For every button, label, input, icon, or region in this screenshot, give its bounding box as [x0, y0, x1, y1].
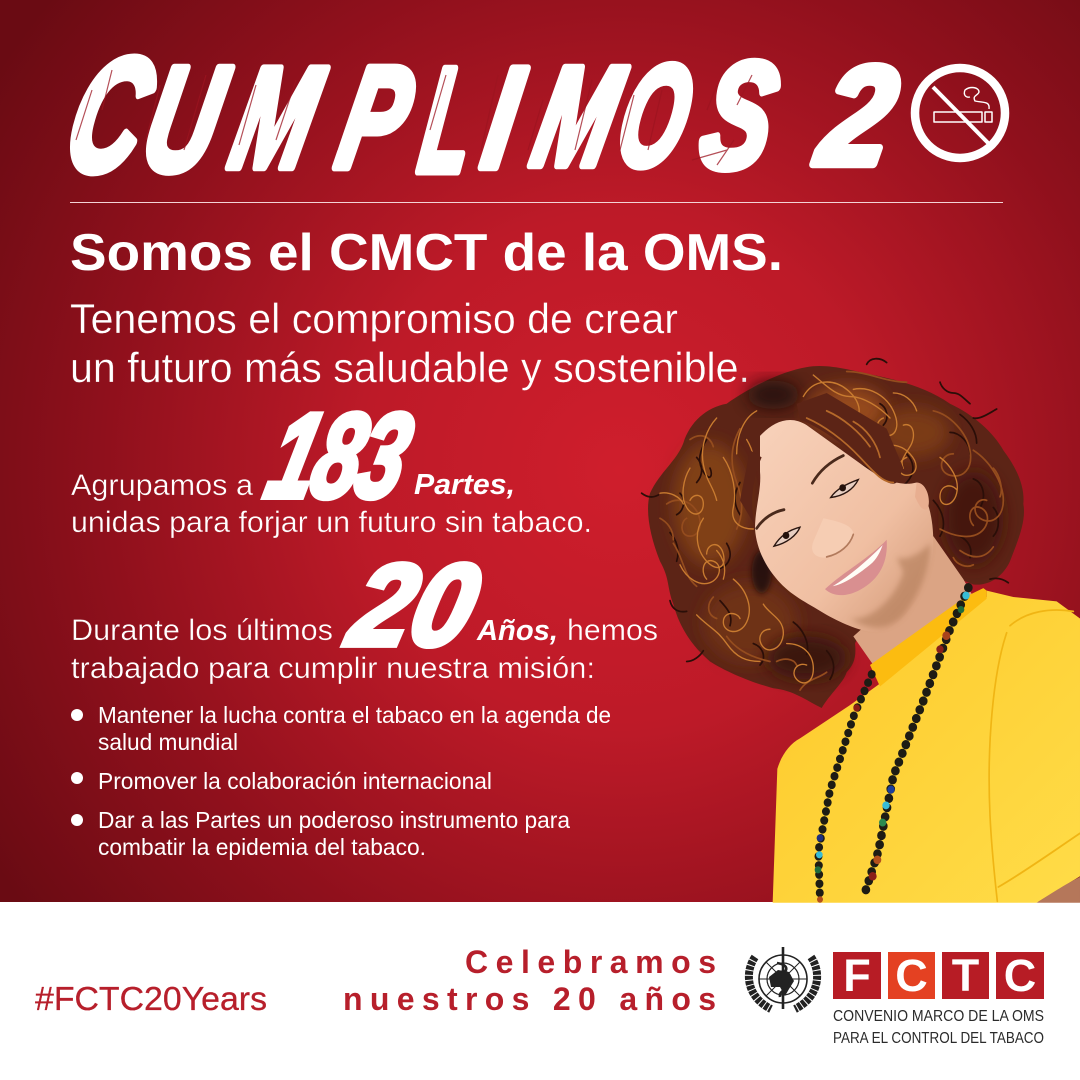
FCTC letter boxes: T	[952, 950, 979, 1001]
face	[755, 420, 933, 632]
logo: WHO emblem	[749, 947, 817, 1009]
bullet one: Mantener la lucha contra el tabaco en la agenda de	[98, 702, 611, 728]
shirt folds	[989, 610, 1080, 901]
FCTC letter boxes	[833, 950, 1044, 1001]
shirt	[773, 591, 1080, 903]
curls: light strands	[660, 375, 957, 683]
nose	[812, 518, 853, 558]
text block: 20 Años: trabajado para cumplir nuestra misión:	[71, 652, 595, 685]
text block: 183 Partes: Agrupamos a	[71, 469, 253, 502]
title: Cumplimos 20 brush lettering: L	[411, 38, 486, 203]
bullet three	[71, 807, 570, 860]
FCTC letter boxes: F	[843, 950, 871, 1001]
eyebrows	[812, 456, 843, 483]
logo caption: PARA EL CONTROL DEL TABACO	[833, 1030, 1044, 1047]
forearm	[1037, 877, 1080, 903]
text block: 183 Partes: Partes,	[414, 469, 515, 501]
title: Cumplimos 20 brush lettering: U	[131, 38, 239, 203]
bullet two: Promover la colaboración internacional	[98, 768, 492, 794]
title: Cumplimos 20 brush lettering: S	[690, 31, 789, 199]
bullet three: combatir la epidemia del tabaco.	[98, 834, 426, 860]
text block: 20 Años	[71, 541, 658, 685]
tagline: Celebramos nuestros 20 años	[343, 944, 716, 1017]
collar	[870, 588, 987, 687]
icon: no smoking circle as zero	[915, 68, 1005, 158]
title: Cumplimos 20 brush lettering: I	[474, 38, 533, 197]
title: Cumplimos 20 brush lettering: C	[52, 26, 170, 204]
text block: 183 Partes: unidas para forjar un futuro sin tabaco.	[71, 506, 592, 539]
title: Cumplimos 20 brush lettering	[52, 26, 1005, 204]
photo: smiling young man with curly hair and yellow shirt	[642, 359, 1080, 903]
tagline: Celebramos nuestros 20 años: Celebramos	[465, 944, 716, 980]
bullet one: salud mundial	[98, 729, 238, 755]
heading: Somos el CMCT de la OMS: Somos el CMCT de la OMS.	[70, 224, 783, 282]
big number 183: 183	[255, 389, 423, 523]
neck	[853, 536, 973, 665]
bullet list: mission	[71, 702, 611, 860]
text block: 20 Años: hemos	[567, 614, 658, 647]
logo: FCTC	[833, 950, 1044, 1047]
text block: 20 Años: Durante los últimos	[71, 614, 333, 647]
bullet one	[71, 702, 611, 755]
hashtag: #FCTC20Years	[35, 980, 267, 1017]
stubble	[850, 543, 930, 627]
curls: mid strands	[660, 371, 1003, 690]
tagline: Celebramos nuestros 20 años: nuestros 20 años	[343, 981, 716, 1017]
title: Cumplimos 20 brush lettering: P	[326, 38, 425, 198]
bullet three: Dar a las Partes un poderoso instrumento para	[98, 807, 570, 833]
curls: dark strands	[642, 359, 1008, 679]
eyes	[831, 480, 858, 497]
FCTC letter boxes: C	[895, 950, 928, 1001]
text block: 183 Partes	[71, 389, 592, 539]
title: Cumplimos 20 brush lettering: M	[521, 37, 636, 195]
text block: 20 Años: Años,	[476, 615, 558, 647]
subheading: commitment statement	[70, 295, 750, 391]
ear	[915, 482, 929, 510]
title: Cumplimos 20 brush lettering: M	[219, 39, 335, 198]
logo caption	[833, 1008, 1044, 1047]
logo caption: CONVENIO MARCO DE LA OMS	[833, 1008, 1044, 1025]
necklace	[815, 588, 970, 903]
brush streaks over the letters	[76, 70, 752, 165]
hair	[642, 359, 1024, 708]
divider line	[70, 202, 1003, 203]
hair over forehead	[797, 393, 903, 484]
title: Cumplimos 20 brush lettering: O	[605, 37, 705, 196]
FCTC letter boxes: C	[1004, 950, 1036, 1001]
subheading: commitment statement: un futuro más saludable y sostenible.	[70, 344, 750, 391]
big number 20: 20	[337, 541, 491, 670]
subheading: commitment statement: Tenemos el compromiso de crear	[70, 295, 678, 342]
title: Cumplimos 20 brush lettering: 2	[807, 38, 907, 194]
white footer band	[0, 902, 1080, 1080]
mouth	[825, 540, 887, 595]
